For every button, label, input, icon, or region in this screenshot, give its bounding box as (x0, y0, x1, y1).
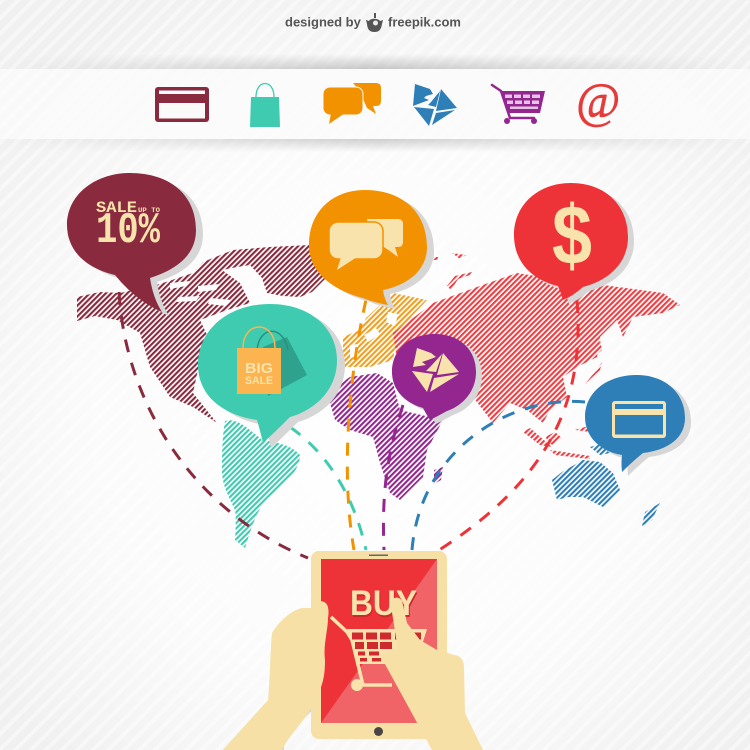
icon: bag: BIG (245, 360, 273, 377)
icon: chat bubbles (329, 219, 403, 270)
sale text: UP TO (138, 207, 160, 214)
icon: envelope (413, 84, 457, 126)
icon: bag: SALE (245, 375, 273, 387)
icon: at sign: @ (576, 72, 620, 128)
bubble: chat (309, 190, 434, 309)
buy text: BUY (350, 584, 417, 623)
connector: maroon (119, 292, 308, 558)
icon: shopping bag (250, 84, 280, 127)
connector: red (436, 300, 578, 552)
connector: purple (383, 405, 403, 550)
icon: chat bubbles (323, 83, 381, 124)
icon banner (0, 54, 750, 152)
sale text: 10% (96, 206, 160, 256)
connector: teal (290, 427, 366, 550)
buy text: BUY (351, 586, 418, 625)
icon: freepik logo (366, 13, 383, 32)
sale text: SALE (96, 199, 137, 217)
icon: card (612, 401, 666, 438)
bubble: mail (392, 334, 482, 424)
credit line (285, 13, 461, 32)
connector: blue (412, 401, 585, 550)
dollar sign: $ (552, 188, 592, 282)
South America (222, 420, 300, 548)
Australia (552, 442, 660, 526)
gray cable arc (282, 690, 322, 750)
icon: envelope (412, 348, 459, 392)
connector: orange (347, 300, 366, 550)
world map (77, 245, 680, 548)
bubble: dollar (514, 183, 634, 304)
cart (331, 617, 427, 691)
Africa (330, 373, 443, 500)
icon: shopping cart (492, 85, 545, 124)
bubble: sale (67, 173, 203, 316)
right hand (380, 598, 483, 750)
Europe (343, 293, 427, 367)
North America (77, 245, 327, 423)
bubble: card (585, 375, 691, 476)
icon: credit card (155, 87, 209, 122)
dashed connectors (119, 292, 585, 558)
bubble: big sale (198, 304, 345, 448)
credit line: freepik.com (388, 14, 461, 30)
credit line: designed by (285, 14, 362, 30)
Asia (393, 253, 680, 459)
tablet (311, 551, 447, 739)
left hand (223, 601, 329, 750)
icon: bag (237, 327, 307, 396)
